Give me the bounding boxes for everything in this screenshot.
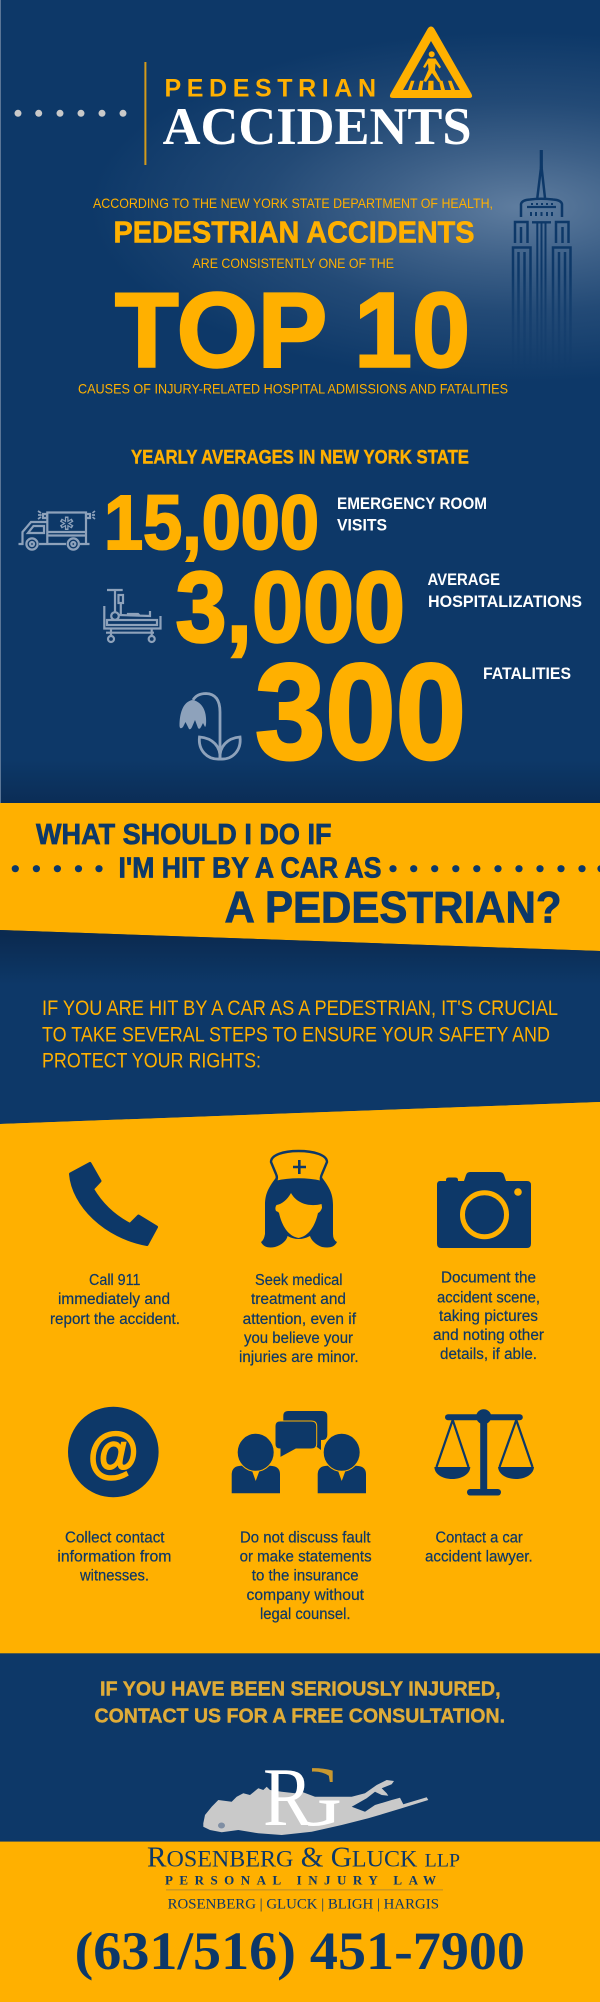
step: call 911: Call 911	[89, 1272, 140, 1289]
firm tagline: PERSONAL INJURY LAW	[165, 1873, 443, 1888]
icon: email at sign	[68, 1407, 159, 1497]
step: document the scene: Document the	[441, 1269, 536, 1286]
icon: email at sign: @	[88, 1420, 138, 1483]
panel: firm contact	[0, 1842, 600, 2002]
step: do not discuss fault: company without	[246, 1587, 365, 1604]
icon: hospital bed	[104, 589, 160, 642]
heading: yearly averages: YEARLY AVERAGES IN NEW YORK STATE	[131, 446, 469, 468]
icon: pedestrian crossing sign	[390, 26, 472, 98]
icon: two people talking	[232, 1411, 366, 1493]
title: PEDESTRIAN	[164, 75, 376, 103]
step: call 911	[50, 1272, 180, 1328]
dotted line	[14, 110, 126, 117]
step: document the scene: and noting other	[433, 1327, 544, 1344]
step: seek medical treatment	[239, 1272, 359, 1366]
intro paragraph: PROTECT YOUR RIGHTS:	[42, 1050, 261, 1073]
dotted line	[12, 865, 600, 872]
icon: camera	[437, 1172, 531, 1248]
step: document the scene	[433, 1269, 544, 1363]
heading: what should I do: I'M HIT BY A CAR AS	[118, 853, 382, 885]
intro text block: PEDESTRIAN ACCIDENTS	[114, 216, 474, 250]
logo: long island map with monogram	[203, 1768, 428, 1835]
panel: intro statement	[0, 930, 600, 1124]
number: 300: 300	[255, 636, 466, 788]
label: emergency room visits: VISITS	[337, 516, 387, 534]
step: document the scene: details, if able.	[440, 1346, 537, 1363]
step: do not discuss fault: Do not discuss fault	[240, 1529, 371, 1546]
call to action heading: CONTACT US FOR A FREE CONSULTATION.	[94, 1705, 505, 1728]
step: seek medical treatment: injuries are minor.	[239, 1349, 359, 1366]
step: collect contact information: witnesses.	[79, 1567, 149, 1584]
step: collect contact information: Collect contact	[65, 1529, 165, 1546]
icon: nurse	[261, 1151, 337, 1247]
step: contact a lawyer	[425, 1529, 533, 1565]
intro text block: ACCORDING TO THE NEW YORK STATE DEPARTMENT OF HEALTH,	[93, 195, 493, 211]
step: call 911: report the accident.	[50, 1311, 180, 1328]
intro paragraph	[42, 997, 558, 1073]
label: average hospitalizations: HOSPITALIZATIONS	[428, 593, 582, 611]
step: document the scene: taking pictures	[439, 1308, 538, 1325]
icon: scales of justice	[434, 1409, 534, 1496]
heading: what should I do: WHAT SHOULD I DO IF	[36, 819, 332, 851]
panel: call to action	[0, 1653, 600, 1844]
step: seek medical treatment: Seek medical	[255, 1272, 342, 1289]
icon: phone	[70, 1164, 156, 1244]
firm name: ROSENBERG & GLUCK LLP	[147, 1843, 460, 1874]
step: do not discuss fault: to the insurance	[252, 1567, 359, 1584]
label: average hospitalizations	[428, 571, 582, 611]
step: collect contact information	[57, 1529, 171, 1584]
heading: what should I do: A PEDESTRIAN?	[224, 884, 562, 933]
panel: what should i do	[0, 803, 600, 951]
intro text block: ARE CONSISTENTLY ONE OF THE	[192, 255, 394, 271]
step: do not discuss fault	[240, 1529, 372, 1623]
logo: long island map with monogram: G	[282, 1748, 342, 1844]
step: collect contact information: information from	[57, 1548, 171, 1565]
firm partners: ROSENBERG | GLUCK | BLIGH | HARGIS	[168, 1896, 439, 1912]
intro text block	[78, 195, 508, 396]
label: average hospitalizations: AVERAGE	[428, 571, 500, 589]
label: fatalities: FATALITIES	[483, 665, 571, 683]
intro text block: CAUSES OF INJURY-RELATED HOSPITAL ADMISSIONS AND FATALITIES	[78, 380, 508, 396]
icon: ambulance	[18, 511, 95, 550]
number: 15,000: 15,000	[104, 480, 319, 566]
icon: wilted flower	[180, 694, 240, 759]
phone number: (631/516) 451-7900	[75, 1921, 525, 1981]
step: call 911: immediately and	[58, 1291, 170, 1308]
step: contact a lawyer: accident lawyer.	[425, 1548, 533, 1565]
number: 3,000: 3,000	[176, 552, 405, 664]
step: do not discuss fault: or make statements	[240, 1548, 372, 1565]
step: contact a lawyer: Contact a car	[436, 1529, 523, 1546]
title: ACCIDENTS	[163, 98, 472, 156]
panel: steps	[0, 1102, 600, 1654]
title divider	[144, 62, 146, 165]
logo: long island map with monogram: R	[263, 1751, 313, 1844]
icon: empire state building	[513, 150, 570, 378]
step: seek medical treatment: you believe your	[244, 1330, 353, 1347]
label: emergency room visits	[337, 495, 487, 534]
call to action heading: IF YOU HAVE BEEN SERIOUSLY INJURED,	[100, 1678, 501, 1701]
heading: what should I do	[36, 819, 562, 933]
step: seek medical treatment: attention, even if	[243, 1311, 357, 1328]
panel: header and statistics	[0, 0, 600, 803]
step: do not discuss fault: legal counsel.	[260, 1606, 350, 1623]
intro text block: TOP 10	[115, 272, 470, 390]
step: document the scene: accident scene,	[437, 1289, 540, 1306]
step: seek medical treatment: treatment and	[251, 1291, 346, 1308]
call to action heading	[94, 1678, 505, 1728]
label: emergency room visits: EMERGENCY ROOM	[337, 495, 487, 513]
